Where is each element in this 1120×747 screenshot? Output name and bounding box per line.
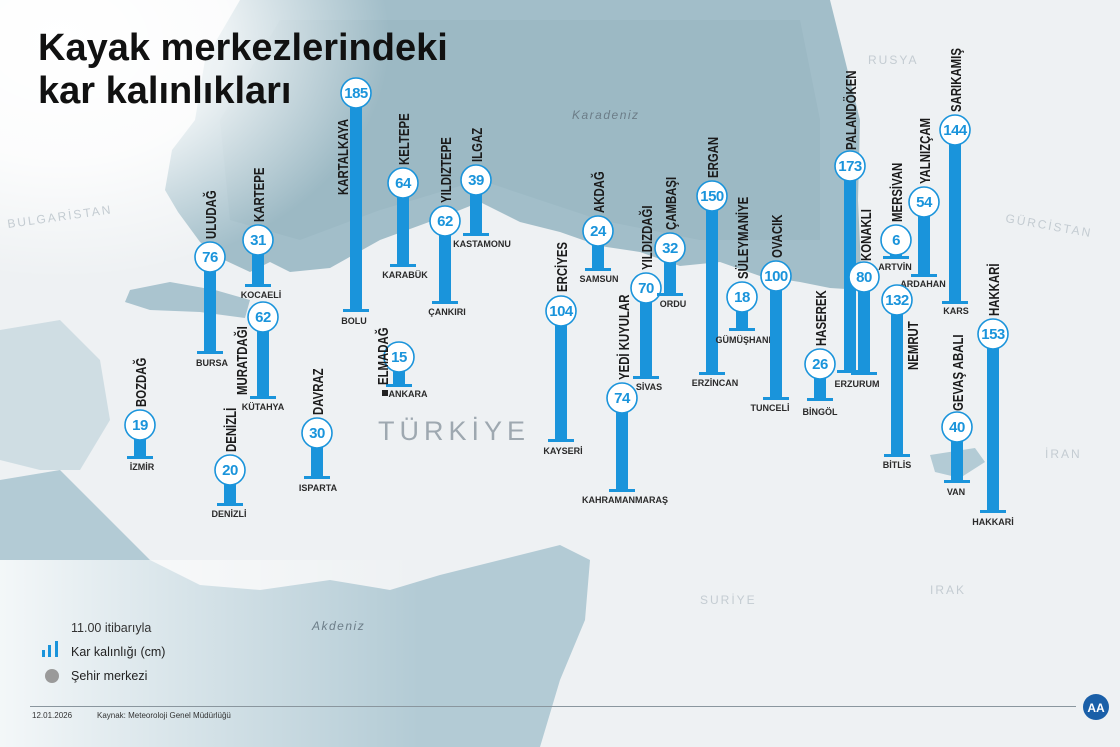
station: Sarıkamış: SARIKAMIŞ (947, 48, 964, 112)
station: Elmadağ: ANKARA (388, 389, 428, 399)
station: Haserek: HASEREK (812, 290, 829, 346)
title (38, 27, 448, 112)
station: Mersivan: 6 (892, 232, 900, 249)
station: Elmadağ: 15 (391, 349, 407, 366)
station: Denizli (212, 408, 246, 519)
station: Çambaşı: ÇAMBAŞI (662, 177, 679, 230)
station: Davraz (299, 368, 338, 493)
station: Erciyes: KAYSERİ (543, 446, 583, 456)
country labels: Akdeniz (311, 619, 365, 633)
station: Gevaş Abalı (942, 334, 972, 497)
station: Kartepe: KOCAELİ (241, 290, 281, 300)
station: Elmadağ: ELMADAĞ (374, 327, 391, 385)
station: Nemrut (882, 285, 921, 470)
station: Yalnızçam (900, 118, 946, 289)
station: Erciyes (543, 242, 583, 456)
station: Mersivan: MERSİVAN (888, 163, 905, 222)
country labels: BULGARİSTAN (6, 202, 113, 231)
station: Denizli: DENİZLİ (222, 408, 239, 452)
station: Ovacık: 100 (764, 268, 788, 285)
station: Yalnızçam: ARDAHAN (900, 279, 946, 289)
station: Çambaşı: 32 (662, 240, 678, 257)
station: Yedi Kuyular (582, 294, 668, 505)
station: Konaklı: ERZURUM (834, 379, 880, 389)
station: Sarıkamış: 144 (943, 122, 968, 139)
station: Mersivan (878, 163, 912, 272)
station: Bozdağ: İZMİR (130, 462, 155, 472)
station: Keltepe: 64 (395, 175, 412, 192)
footer: Kaynak: Meteoroloji Genel Müdürlüğü (97, 711, 231, 720)
station: Ergan: 150 (700, 188, 724, 205)
station: Gevaş Abalı: GEVAŞ ABALI (949, 334, 966, 411)
station: Denizli: DENİZLİ (212, 509, 246, 519)
station: Uludağ: ULUDAĞ (202, 190, 219, 239)
station: Erciyes: 104 (549, 303, 574, 320)
country labels: TÜRKİYE (378, 415, 530, 446)
title: Kayak merkezlerindeki (38, 27, 448, 69)
station: Uludağ: 76 (202, 249, 218, 266)
station: Nemrut: NEMRUT (904, 321, 921, 370)
country labels: SURİYE (700, 593, 757, 607)
country labels: İRAN (1045, 447, 1082, 461)
station: Yıldızdağı (631, 205, 662, 392)
footer: 12.01.2026 (32, 711, 73, 720)
station: Ovacık: OVACIK (768, 214, 785, 258)
station: Muratdağı: MURATDAĞI (233, 326, 250, 395)
station: Bozdağ (125, 358, 155, 472)
station: Hakkari (972, 263, 1014, 527)
icon: bars (42, 641, 58, 657)
station: Yedi Kuyular: KAHRAMANMARAŞ (582, 495, 668, 505)
country labels (6, 53, 1093, 633)
title: kar kalınlıkları (38, 70, 292, 112)
station: Yıldızdağı: 70 (638, 280, 654, 297)
station: Kartalkaya (334, 78, 371, 326)
station: Yıldızdağı: YILDIZDAĞI (638, 205, 655, 270)
station: Kartepe: KARTEPE (250, 167, 267, 222)
station: Kartalkaya: KARTALKAYA (334, 119, 351, 195)
station: Keltepe (382, 113, 428, 280)
station: Akdağ: SAMSUN (579, 274, 619, 284)
station: Ovacık (750, 214, 791, 413)
station: Süleymaniye: 18 (734, 289, 750, 306)
station: Haserek (802, 290, 838, 417)
station: Sarıkamış: KARS (943, 306, 969, 316)
country labels: RUSYA (868, 53, 918, 67)
station: Konaklı (834, 209, 880, 389)
station: Keltepe: KARABÜK (382, 270, 428, 280)
station: Haserek: BİNGÖL (802, 407, 838, 417)
station: Erciyes: ERCİYES (553, 242, 570, 292)
station: Ilgaz (453, 128, 511, 249)
station: Nemrut: 132 (885, 292, 909, 309)
country labels: IRAK (930, 583, 966, 597)
station: Yedi Kuyular: YEDİ KUYULAR (615, 294, 632, 380)
station: Davraz: DAVRAZ (309, 368, 326, 415)
station: Gevaş Abalı: VAN (947, 487, 965, 497)
station: Hakkari: 153 (981, 326, 1005, 343)
station: Nemrut: BİTLİS (883, 460, 911, 470)
station: Davraz: ISPARTA (299, 483, 338, 493)
station: Uludağ: BURSA (196, 358, 228, 368)
station: Palandöken: 173 (838, 158, 862, 175)
station: Yıldıztepe: ÇANKIRI (428, 307, 466, 317)
station: Ergan (692, 137, 738, 388)
legend: 11.00 itibarıyla (71, 621, 151, 635)
station: Akdağ (579, 171, 619, 284)
station: Mersivan: ARTVİN (878, 262, 912, 272)
station: Kartepe (241, 167, 281, 300)
station: Davraz: 30 (309, 425, 325, 442)
station: Akdağ: 24 (590, 223, 607, 240)
station: Hakkari: HAKKARİ (985, 263, 1002, 316)
station: Palandöken (835, 70, 865, 373)
station: Bozdağ: BOZDAĞ (132, 358, 149, 407)
station: Kartalkaya: BOLU (341, 316, 367, 326)
station: Çambaşı: ORDU (660, 299, 686, 309)
station: Gevaş Abalı: 40 (949, 419, 965, 436)
station: Sarıkamış (940, 48, 970, 316)
station: Yıldıztepe: 62 (437, 213, 453, 230)
station: Ovacık: TUNCELİ (750, 403, 790, 413)
station: Yalnızçam: 54 (916, 194, 933, 211)
station: Haserek: 26 (812, 356, 828, 373)
station: Süleymaniye (715, 197, 775, 345)
station: Konaklı: 80 (856, 269, 872, 286)
station: Yedi Kuyular: 74 (614, 390, 631, 407)
station: Kartepe: 31 (250, 232, 266, 249)
station: Hakkari: HAKKARİ (972, 517, 1014, 527)
station: Yalnızçam: YALNIZÇAM (916, 118, 933, 184)
footer (30, 706, 1076, 720)
station: Çambaşı (655, 177, 686, 309)
country labels: Karadeniz (572, 108, 640, 122)
station: Yıldızdağı: SİVAS (636, 382, 662, 392)
station: Ilgaz: ILGAZ (468, 128, 485, 162)
station: Muratdağı: 62 (255, 309, 271, 326)
station: Keltepe: KELTEPE (395, 113, 412, 165)
station: Bozdağ: 19 (132, 417, 148, 434)
station: Akdağ: AKDAĞ (590, 171, 607, 213)
station: Yıldıztepe (428, 137, 466, 317)
legend (42, 621, 165, 683)
station: Konaklı: KONAKLI (857, 209, 874, 261)
station: Ergan: ERGAN (704, 137, 721, 178)
station: Muratdağı (233, 302, 285, 412)
legend: Şehir merkezi (71, 669, 147, 683)
station: Elmadağ (374, 327, 428, 399)
station: Yıldıztepe: YILDIZTEPE (437, 137, 454, 203)
icon: AA logo (1083, 694, 1109, 720)
station: Palandöken: PALANDÖKEN (842, 70, 859, 150)
station: Kartalkaya: 185 (344, 85, 368, 102)
station: Süleymaniye: GÜMÜŞHANE (715, 335, 775, 345)
station: Denizli: 20 (222, 462, 238, 479)
station: Uludağ (195, 190, 228, 368)
country labels: GÜRCİSTAN (1004, 211, 1093, 240)
icon: AA logo: AA (1087, 701, 1105, 715)
icon: city dot (45, 669, 59, 683)
legend: Kar kalınlığı (cm) (71, 645, 165, 659)
station: Muratdağı: KÜTAHYA (242, 402, 285, 412)
station: Ilgaz: KASTAMONU (453, 239, 511, 249)
station: Ilgaz: 39 (468, 172, 484, 189)
station: Süleymaniye: SÜLEYMANİYE (734, 197, 751, 279)
station: Ergan: ERZİNCAN (692, 378, 738, 388)
